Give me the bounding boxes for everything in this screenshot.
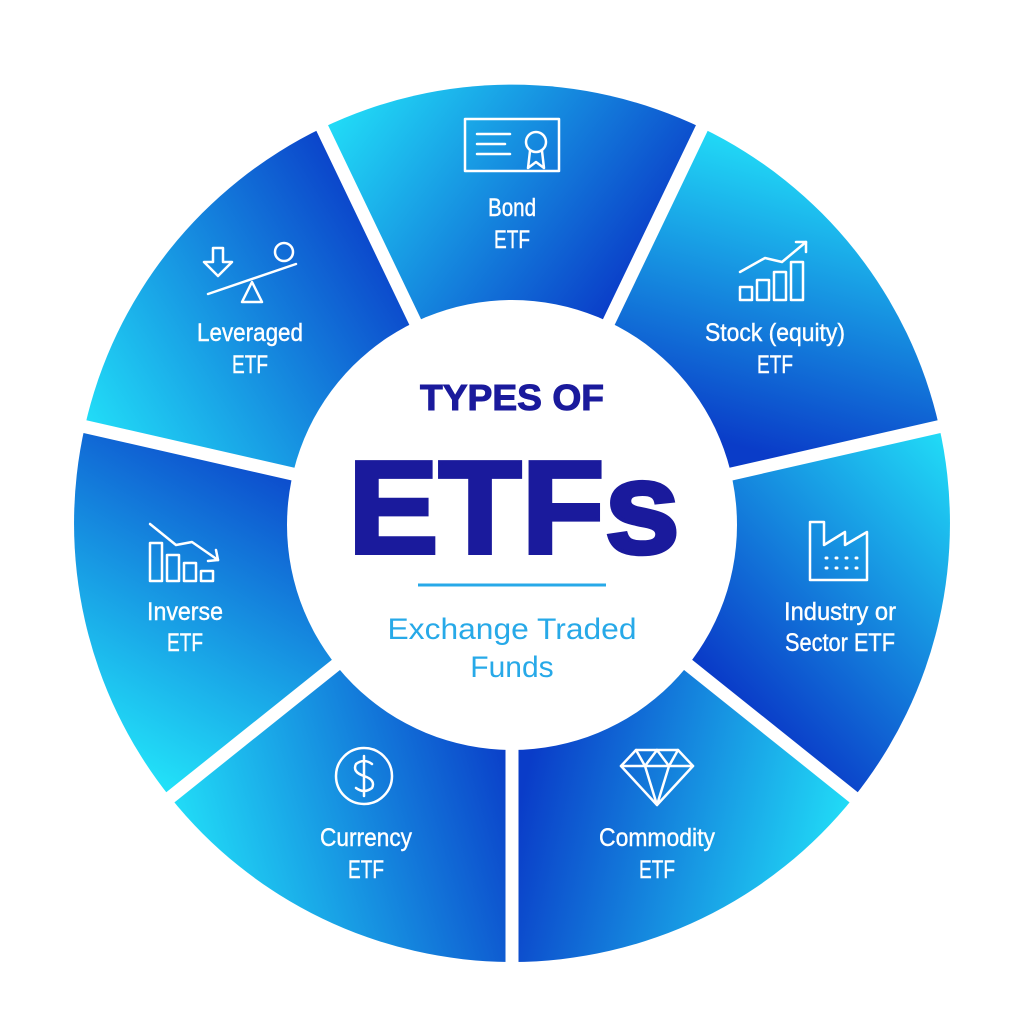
label: currency: Currency	[320, 824, 412, 852]
label: currency: ETF	[348, 856, 384, 884]
label: leveraged	[197, 319, 303, 379]
label: commodity	[599, 824, 715, 884]
label: leveraged: ETF	[232, 351, 268, 379]
segment: leveraged	[85, 128, 512, 524]
segment: inverse	[74, 426, 512, 797]
text: Funds	[470, 651, 554, 684]
label: industry: Sector ETF	[785, 629, 895, 657]
label: currency	[320, 824, 412, 884]
icon: certificate	[465, 119, 559, 171]
label: bond: Bond	[488, 194, 536, 222]
segment: stock	[512, 128, 939, 524]
segment: industry	[512, 426, 950, 797]
label: inverse	[147, 598, 223, 657]
icon: bar growth chart	[740, 242, 806, 300]
label: leveraged: Leveraged	[197, 319, 303, 347]
segment: currency	[170, 524, 512, 962]
label: bond: ETF	[494, 226, 530, 254]
icon: factory	[810, 522, 867, 580]
icon: seesaw	[204, 243, 296, 302]
icon: diamond	[621, 750, 693, 805]
segment: bond	[322, 85, 702, 524]
label: commodity: Commodity	[599, 824, 715, 852]
label: industry	[784, 598, 896, 657]
label: industry: Industry or	[784, 598, 896, 626]
label: inverse: ETF	[167, 629, 203, 657]
subtitle: Exchange Traded	[388, 613, 636, 646]
ring of segments	[69, 85, 955, 975]
segment: commodity	[512, 524, 854, 962]
title: types of: TYPES OF	[420, 377, 604, 418]
label: inverse: Inverse	[147, 598, 223, 626]
icon: coin	[336, 748, 392, 804]
label: stock: ETF	[757, 351, 793, 379]
label: stock: Stock (equity)	[705, 319, 845, 347]
icon: declining chart	[150, 524, 218, 581]
label: commodity: ETF	[639, 856, 675, 884]
divider line	[418, 584, 606, 586]
label: bond	[488, 194, 536, 254]
center circle	[287, 300, 737, 750]
label: stock	[705, 319, 845, 379]
title: ETFs: ETFs	[348, 434, 680, 581]
